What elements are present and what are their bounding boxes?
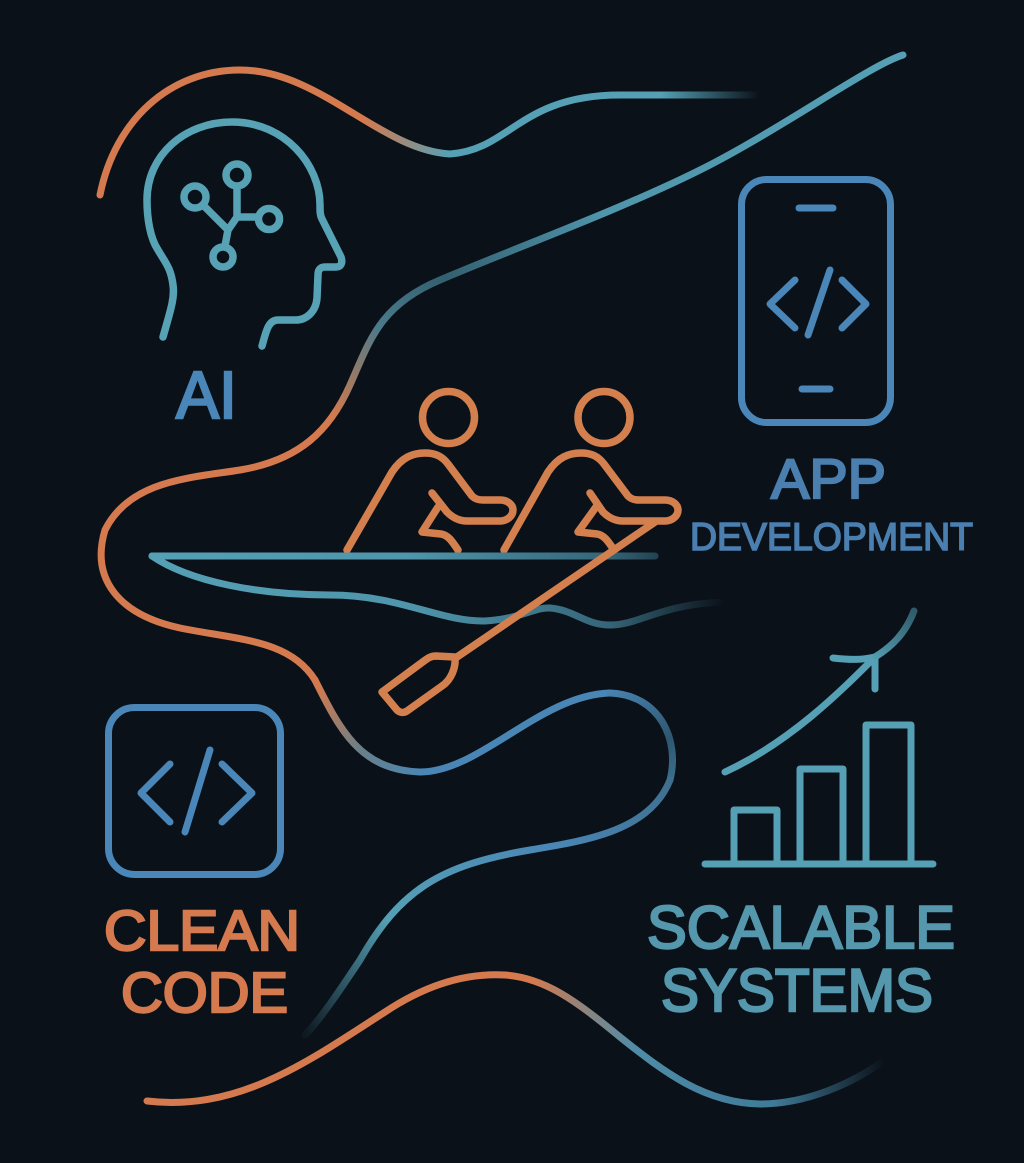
- icon: growth chart: [705, 611, 933, 864]
- rowers: [347, 392, 678, 550]
- label: AI: AI: [176, 358, 237, 433]
- label: APP: APP: [771, 447, 886, 510]
- rower 1: [347, 392, 513, 550]
- icon: phone with code: [742, 180, 890, 422]
- growth arrow: [725, 657, 875, 772]
- flowing line: long river: [101, 55, 903, 1035]
- icon: AI head: [147, 122, 342, 346]
- label: DEVELOPMENT: DEVELOPMENT: [690, 516, 973, 559]
- label: SCALABLE: SCALABLE: [647, 894, 955, 961]
- rower 2: [504, 392, 678, 550]
- icon: network nodes: [184, 164, 280, 267]
- flowing line: top: [100, 70, 760, 195]
- bars: [705, 725, 933, 864]
- label: CLEAN: CLEAN: [104, 899, 300, 963]
- label: SYSTEMS: SYSTEMS: [661, 957, 933, 1024]
- boat deck: [152, 552, 655, 560]
- boat hull and water: [152, 556, 725, 625]
- icon: code box: [108, 708, 280, 874]
- label: CODE: CODE: [121, 961, 288, 1025]
- boat: [152, 556, 725, 625]
- paddle: [382, 522, 655, 712]
- flowing line: bottom: [147, 975, 885, 1104]
